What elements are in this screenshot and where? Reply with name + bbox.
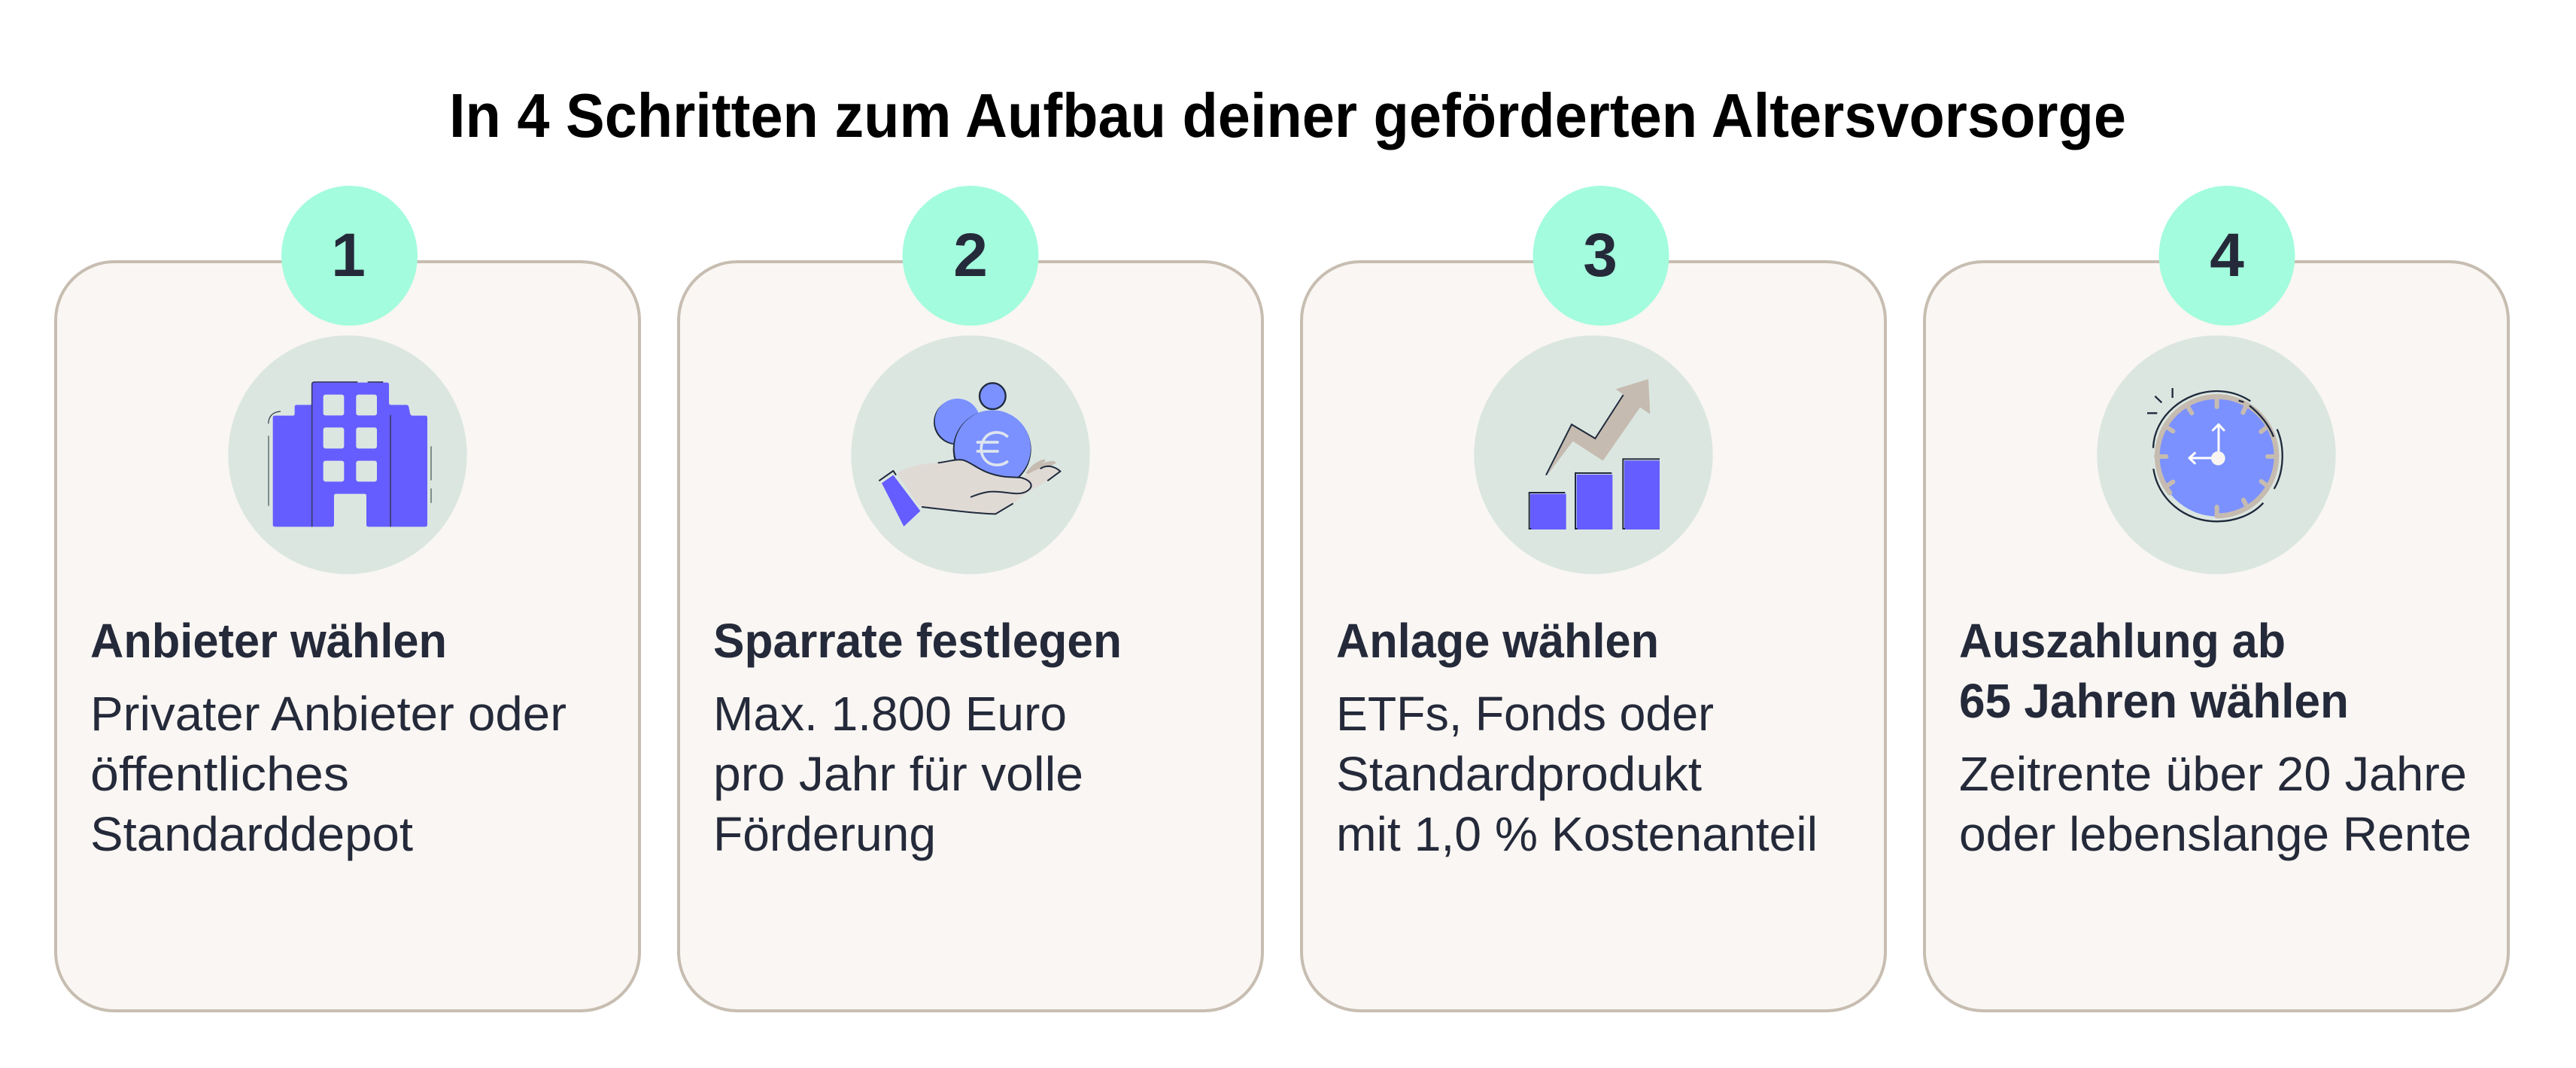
number badge 4 <box>2159 186 2295 326</box>
title: In 4 Schritten zum Aufbau deiner geförderten Altersvorsorge <box>449 80 2126 150</box>
panel: step 1 <box>56 186 639 1011</box>
icon: rising bar chart with arrow <box>1474 335 1713 574</box>
heading 4: Auszahlung ab <box>1959 614 2286 668</box>
number badge 2: 2 <box>953 221 988 290</box>
number badge 1 <box>281 186 418 326</box>
icon: clock <box>2097 335 2336 574</box>
number badge 3 <box>1533 186 1669 326</box>
body text 3: mit 1,0 % Kostenanteil <box>1336 807 1818 861</box>
body text 1: Privater Anbieter oder <box>90 687 567 741</box>
body text 2: Förderung <box>713 807 936 861</box>
body text 3: Standardprodukt <box>1336 747 1702 801</box>
body text 1: öffentliches <box>90 747 349 801</box>
body text 4: oder lebenslange Rente <box>1959 807 2471 861</box>
body text 3 <box>1336 687 1818 861</box>
body text 3: ETFs, Fonds oder <box>1336 687 1714 741</box>
number badge 3: 3 <box>1583 221 1618 290</box>
icon: hand holding euro coins <box>851 335 1090 574</box>
body text 2: Max. 1.800 Euro <box>713 687 1067 741</box>
card background 1 <box>56 262 639 1011</box>
card background 3 <box>1302 262 1885 1011</box>
heading 4 <box>1959 614 2349 728</box>
body text 4 <box>1959 747 2471 861</box>
heading 1: Anbieter wählen <box>90 614 447 668</box>
body text 4: Zeitrente über 20 Jahre <box>1959 747 2467 801</box>
heading 4: 65 Jahren wählen <box>1959 674 2349 728</box>
heading 2: Sparrate festlegen <box>713 614 1122 668</box>
heading 3: Anlage wählen <box>1336 614 1659 668</box>
panel: step 4 <box>1924 186 2508 1011</box>
panel: step 3 <box>1302 186 1885 1011</box>
number badge 2 <box>903 186 1038 326</box>
card background 4 <box>1924 262 2508 1011</box>
number badge 4: 4 <box>2210 221 2244 290</box>
number badge 1: 1 <box>331 221 366 290</box>
panel: step 2 <box>679 186 1262 1011</box>
body text 2 <box>713 687 1083 861</box>
body text 1: Standarddepot <box>90 807 413 861</box>
card background 2 <box>679 262 1262 1011</box>
icon: office building <box>228 335 467 574</box>
body text 2: pro Jahr für volle <box>713 747 1083 801</box>
body text 1 <box>90 687 567 861</box>
